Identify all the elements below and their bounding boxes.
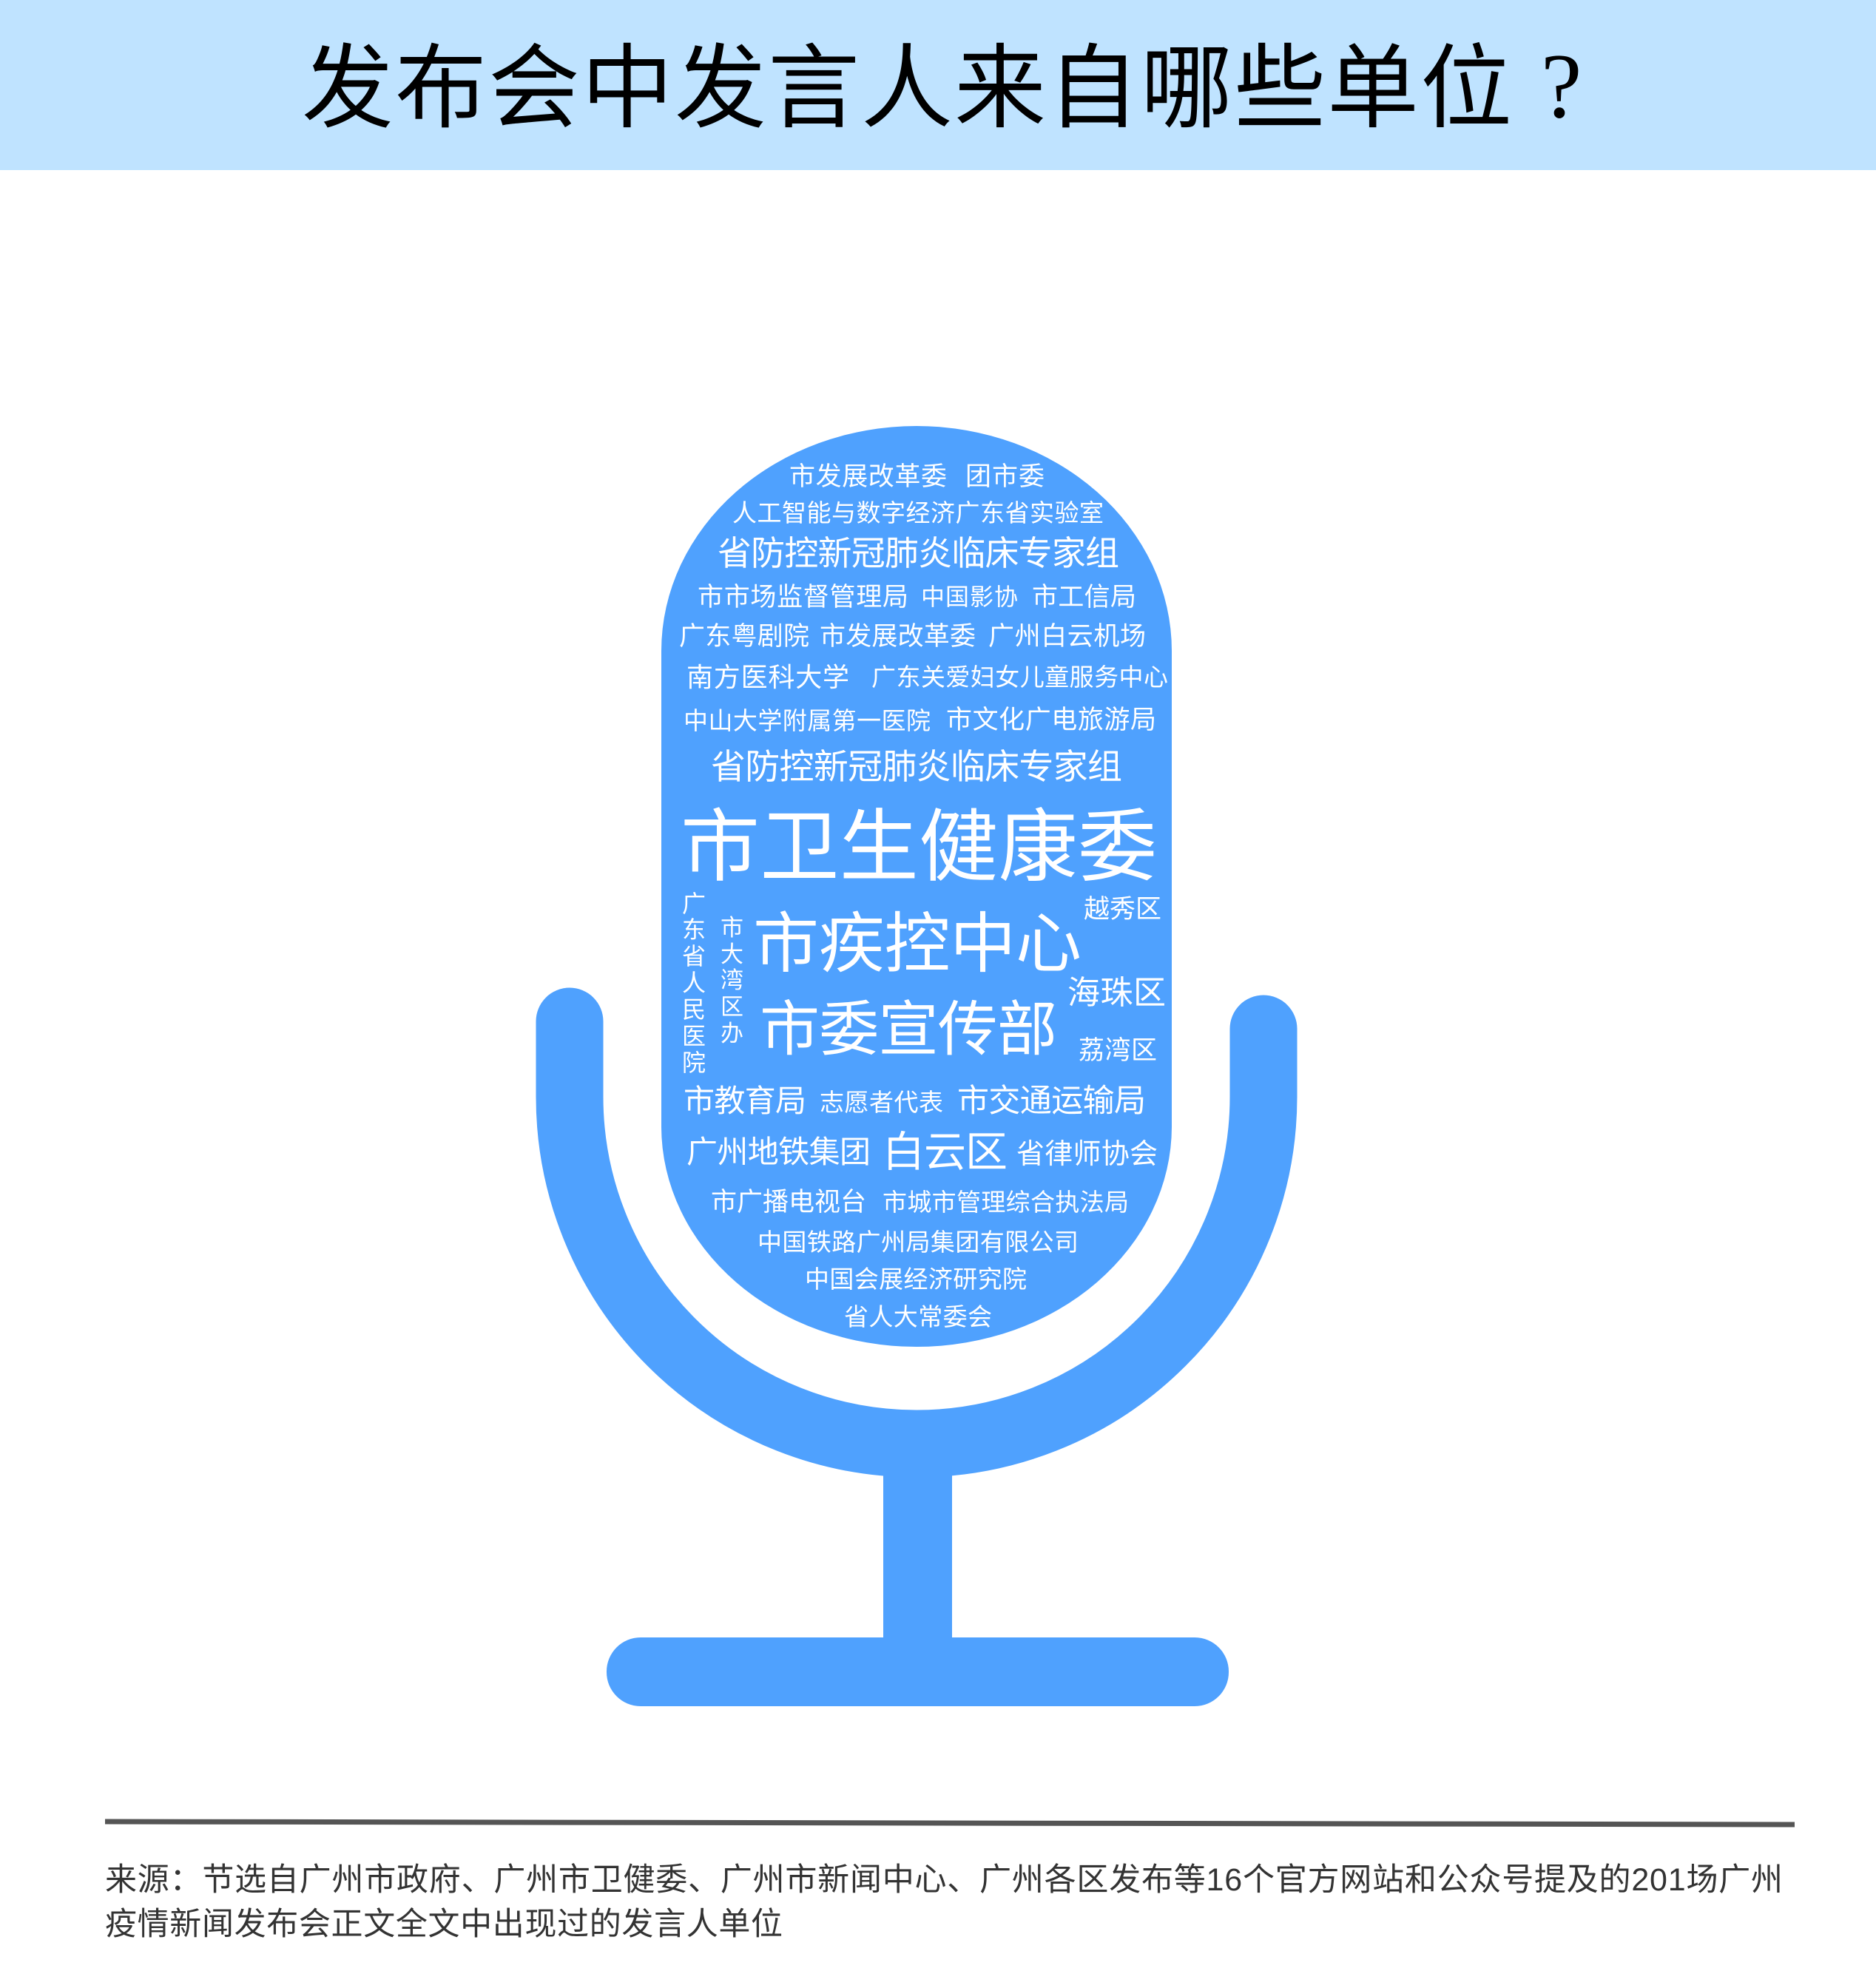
word: 广东省人民医院 (vertical): 广 [682,890,706,917]
word: 市市场监督管理局: 市市场监督管理局 [698,583,908,612]
word: 广东省人民医院 (vertical): 民 [682,996,706,1023]
word: 荔湾区: 荔湾区 [1079,1036,1157,1065]
word: 广东省人民医院 (vertical): 东 [682,916,706,943]
word: 越秀区: 越秀区 [1084,895,1161,924]
word: 广东关爱妇女儿童服务中心: 广东关爱妇女儿童服务中心 [871,663,1168,691]
word: 市委宣传部: 市委宣传部 [760,997,1057,1064]
microphone base [607,1637,1229,1706]
word: 市城市管理综合执法局: 市城市管理综合执法局 [883,1189,1129,1216]
word: 市大湾区办 (vertical): 湾 [721,967,743,993]
title banner [0,0,1876,170]
word: 市广播电视台: 市广播电视台 [711,1188,866,1217]
microphone stem [883,1472,952,1649]
title: 发布会中发言人来自哪些单位 [302,38,1512,140]
word: 市交通运输局: 市交通运输局 [957,1083,1146,1119]
word cloud [679,462,1168,1331]
word: 省防控新冠肺炎临床专家组: 省防控新冠肺炎临床专家组 [718,534,1119,572]
word: 市工信局: 市工信局 [1032,583,1136,612]
word: 广东省人民医院 (vertical): 人 [682,970,706,996]
word: 市发展改革委: 市发展改革委 [789,462,947,491]
word: 中国铁路广州局集团有限公司: 中国铁路广州局集团有限公司 [758,1228,1079,1256]
word: 中国影协: 中国影协 [921,584,1018,610]
source note: 疫情新闻发布会正文全文中出现过的发言人单位 [105,1907,783,1942]
word: 广州地铁集团: 广州地铁集团 [686,1135,871,1169]
word: 市发展改革委: 市发展改革委 [820,622,976,651]
word: 广东省人民医院 (vertical): 省 [682,943,706,970]
word: 志愿者代表: 志愿者代表 [820,1089,943,1116]
title: ? [1541,36,1582,138]
word: 广州白云机场: 广州白云机场 [988,622,1146,651]
word: 省人大常委会: 省人大常委会 [844,1303,992,1331]
word: 广东省人民医院 (vertical): 院 [682,1049,706,1076]
source note: 来源：节选自广州市政府、广州市卫健委、广州市新闻中心、广州各区发布等16个官方网站和公众号提及的201场广州 [105,1862,1783,1898]
word: 中山大学附属第一医院: 中山大学附属第一医院 [684,707,931,734]
word: 省律师协会: 省律师协会 [1016,1139,1158,1170]
word: 市大湾区办 (vertical): 办 [721,1021,743,1047]
microphone holder arc [570,1021,1263,1444]
word: 市大湾区办 (vertical): 区 [721,994,743,1020]
word: 市文化广电旅游局: 市文化广电旅游局 [946,706,1156,734]
word: 市卫生健康委: 市卫生健康委 [681,802,1157,891]
word: 南方医科大学: 南方医科大学 [686,662,849,692]
word: 人工智能与数字经济广东省实验室: 人工智能与数字经济广东省实验室 [732,499,1104,527]
word: 市教育局: 市教育局 [684,1083,806,1118]
word: 市大湾区办 (vertical): 大 [721,941,743,967]
word: 省防控新冠肺炎临床专家组: 省防控新冠肺炎临床专家组 [711,747,1122,786]
source note [105,1862,1783,1942]
microphone capsule [661,426,1172,1347]
word: 白云区: 白云区 [883,1129,1008,1176]
word: 海珠区: 海珠区 [1067,975,1166,1011]
icon: microphone [570,426,1263,1706]
word: 中国会展经济研究院: 中国会展经济研究院 [805,1265,1027,1293]
word: 团市委: 团市委 [965,462,1045,491]
word: 市疾控中心: 市疾控中心 [753,907,1082,981]
word: 市大湾区办 (vertical): 市 [721,915,743,941]
word: 广东省人民医院 (vertical): 医 [682,1023,706,1049]
word: 广东粤剧院: 广东粤剧院 [679,622,809,651]
